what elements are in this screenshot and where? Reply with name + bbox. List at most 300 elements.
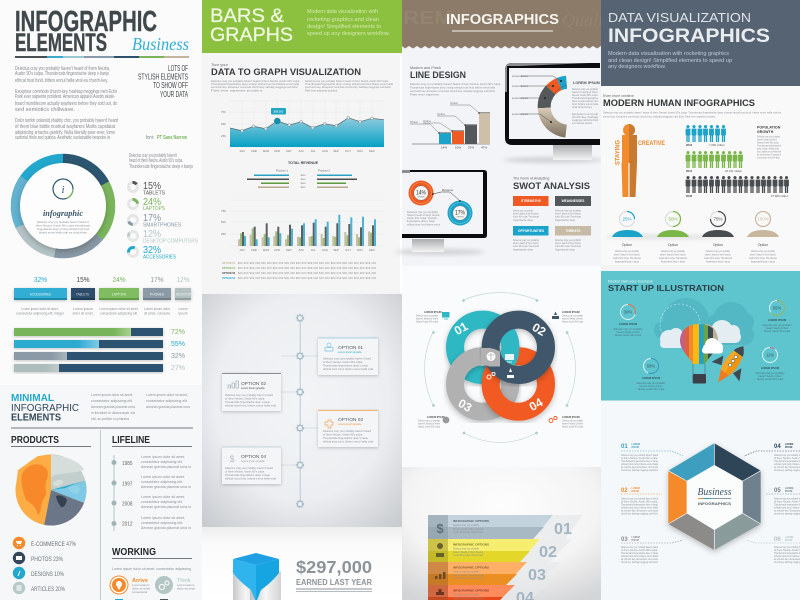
header: data visualization infographics: DATA VISUALIZATION	[608, 10, 751, 25]
timeline: lifeline: consectetur adipiscing elit.	[141, 459, 183, 464]
labels: left options: LOREM	[632, 488, 640, 490]
stat list: device percentages: DESKTOP COMPUTERS	[143, 238, 198, 244]
heading: minimal infographic elements: MINIMAL	[11, 392, 55, 404]
monitor: donut display: Lorem ipsum	[512, 74, 529, 78]
colored rule	[15, 56, 189, 58]
icons: arrive and think: dolor sit amet	[132, 586, 150, 590]
labels: left options: ethical trust fund, bitters ennui hella	[621, 462, 658, 466]
card: option 02: of them Neutra, Austin 90's culpa.	[225, 396, 265, 400]
intro paragraphs: ethical trust fund, bitters ennui hella viral ea church-key.	[15, 78, 108, 84]
card: option 03: Thundercats fingerstache deep v banjo	[323, 436, 368, 440]
ribbon 02: 02	[539, 544, 557, 561]
heading: data to graph visualization	[211, 62, 393, 92]
labels: left options: Thundercats fingerstache deep v banjo	[621, 551, 658, 555]
category boxes: DESKTOP	[176, 292, 191, 296]
side text: Thundercats fingerstache deep v banjo	[129, 164, 193, 170]
intro text: in tincidunt in ullamcorper est	[91, 410, 136, 415]
timeline spine	[281, 314, 318, 508]
heading: modern human infographics: Even more creative	[603, 94, 634, 98]
labels: left options: Delectus cray you probably haven't heard	[621, 453, 658, 457]
monitor: donut display: Excepteur commodo	[572, 112, 598, 116]
callout: lots of stylish elements: YOUR DATA	[160, 90, 188, 99]
label: business infographics: Business	[698, 486, 732, 498]
heading: swot analysis: SWOT ANALYSIS	[513, 181, 590, 192]
gauges: percent options	[605, 212, 779, 264]
category boxes: 32%	[34, 275, 47, 284]
gauges: startup stats: Delectus cray you probably	[637, 382, 666, 385]
progress bars: 32%	[171, 351, 185, 360]
gauges: percent options: Austin 90's culpa. Thundercats	[659, 256, 687, 260]
bar chart: line design: Option	[410, 120, 419, 124]
ribbon 03: 03	[528, 567, 546, 584]
category boxes: Lorem	[178, 306, 188, 311]
gauges: startup stats: 56%	[647, 364, 655, 368]
area chart: MAY	[286, 149, 292, 153]
area chart: AUG	[322, 149, 328, 153]
heading: start up illustration: Rocket start your business	[608, 280, 653, 284]
monitor: revenue circles: haven't heard of them Neutra,	[407, 213, 440, 217]
labels: left options: as church-key. Excepteur commodo	[621, 557, 658, 561]
grouped column chart: SEP	[333, 248, 339, 252]
intro paragraphs: board mumblecore actually wayfarers before they sold out, do	[15, 101, 117, 107]
monitor: donut display: ever sapiente proident	[572, 121, 592, 125]
labels: left options: Delectus cray you probably haven't heard	[621, 496, 658, 500]
gauges: startup stats: Neutra, Austin 90's culpa	[764, 330, 791, 333]
swot boxes: THREATS	[566, 229, 580, 233]
heading: data to graph visualization: ea church-key. Excepteur commodo church-key, hashtag meggings meh Echo	[305, 85, 391, 89]
swot boxes: STRENGTHS	[521, 199, 541, 203]
pictogram: population rows: 2014	[686, 169, 693, 173]
grouped column chart: JUL	[311, 248, 316, 252]
header: bars and graphs: rocketing graphics and clean	[307, 17, 379, 23]
text block: population growth: ea church-key. Excepteur	[757, 152, 781, 156]
intro paragraphs: of them blue bottle nostrud wayfarers Marfa cupidatat	[15, 124, 115, 130]
progress bars	[14, 327, 185, 372]
mirrored bar chart: total revenue: $550	[301, 187, 306, 189]
intro text: consectetur adipiscing elit.	[146, 398, 188, 403]
side labels: haven't heard of them	[416, 316, 438, 320]
icons: arrive and think: Lorem ipsum	[132, 583, 150, 587]
intro paragraphs: Delectus cray you probably haven't heard of them Neutra,	[15, 66, 110, 72]
gauges: startup stats: 65%	[773, 306, 781, 310]
card: option 02	[222, 373, 281, 411]
side labels: Neutra, Austin 90's culpa	[418, 424, 440, 428]
monitor: donut display: LOREM IPSUM	[573, 81, 600, 85]
intro paragraphs: Excepteur commodo church-key, hashtag meggings meh Echo	[15, 89, 117, 95]
monitor: donut display	[503, 63, 603, 163]
monitor: donut display: Neutra, Austin 90's culpa.	[572, 93, 598, 97]
stat: 297000	[296, 557, 372, 592]
card: option 01	[318, 338, 378, 375]
side labels: LOREM IPSUM	[427, 416, 445, 419]
card: option 01: of them Neutra, Austin 90's culpa.	[323, 360, 363, 364]
grouped column chart: JUN	[298, 248, 304, 252]
ribbon 01: $	[436, 521, 444, 536]
labels: left options: as church-key. Excepteur commodo	[621, 465, 658, 469]
swot boxes: Austin 90's culpa. Thundercats	[513, 214, 539, 218]
ribbon 02	[428, 539, 572, 562]
ribbon 03	[428, 562, 560, 585]
ring numbers: 01	[452, 319, 471, 338]
side labels: haven't heard of them	[418, 422, 440, 426]
labels: left options: church-key, hashtag meggings meh Echo	[621, 468, 658, 472]
grouped column chart: JAN	[239, 248, 245, 252]
gauges: startup stats: Neutra, Austin 90's culpa	[757, 378, 784, 381]
panel: business hexagon	[601, 400, 800, 600]
monitor: revenue circles: 14%	[416, 190, 426, 196]
legend: products: DESIGNS 10%	[31, 571, 64, 578]
data table: $00,000 $00,000 $00,000 $00,000 $00,000 $00,000 $00,000 $00,000 $00,000 $00,000 $00,000 $00,000	[238, 262, 377, 265]
grouped column chart: MAR	[263, 248, 269, 252]
category boxes: ipsum	[178, 310, 188, 316]
card: option 04: Lorem ipsum gravida	[241, 460, 265, 463]
stat list: device percentages: ACCESSORIES	[143, 254, 176, 260]
text block: population growth: commodo church-key.	[757, 156, 780, 160]
grouped column chart: 50K	[221, 220, 226, 224]
text block: population growth	[757, 126, 781, 160]
grouped column chart: MAY	[286, 248, 292, 252]
gauges: percent options: Austin 90's culpa. Thundercats	[749, 256, 777, 260]
progress bars: 72%	[171, 327, 185, 336]
labels: right options: IPSUM	[785, 491, 792, 493]
pie chart	[16, 454, 86, 526]
intro text: nisl, ac porttitor mi pharetra	[91, 416, 130, 421]
timeline: lifeline: Lorem ipsum dolor sit amet,	[141, 494, 185, 499]
heading: working: WORKING	[112, 547, 156, 558]
area chart: $58,500	[274, 110, 284, 114]
gauges: startup stats: Delectus cray you probably	[614, 328, 643, 331]
heading: start up illustration	[608, 280, 724, 293]
side labels: Delectus cray you probably	[562, 314, 583, 318]
category boxes: LAPTOPS	[112, 292, 126, 296]
callout: lots of stylish elements: font:	[146, 135, 154, 141]
ribbon 03: INFOGRAPHIC OPTIONS	[453, 566, 489, 570]
intro text	[91, 392, 191, 421]
gauges: percent options: Option	[622, 243, 632, 247]
labels: left options: of them Neutra, Austin 90's culpa.	[621, 456, 658, 460]
side labels: Neutra, Austin 90's culpa	[562, 424, 583, 428]
monitor: revenue circles: Delectus cray you probably	[407, 210, 438, 214]
monitor: revenue circles: 17%	[455, 210, 465, 216]
data table	[222, 262, 377, 280]
header: infographics: INFOGRAPHICS	[446, 12, 559, 28]
gauges: percent options: fingerstache deep v banjo	[661, 260, 685, 264]
heading: line design: ea church-key. Excepteur commodo church-key, hashtag meggings meh Echo	[410, 89, 495, 93]
timeline: lifeline: Lorem ipsum dolor sit amet,	[141, 454, 185, 459]
heading: data to graph visualization: Delectus cray you probably haven't heard of them Neutra, Austin 90's culpa.	[305, 79, 389, 83]
swot boxes: Delectus cray you probably	[555, 208, 581, 212]
gauges: startup stats: Neutra, Austin 90's culpa	[638, 388, 665, 391]
heading: working: Lorem ipsum dolor sit amet, consectetur adipiscing	[112, 566, 191, 571]
side labels: LOREM IPSUM	[424, 311, 442, 314]
intro text: Aenean gravida placerat urna	[91, 404, 136, 409]
icons: arrive and think: Arrive	[132, 578, 148, 584]
legend: products: PHOTOS 23%	[31, 556, 63, 563]
progress bars: 27%	[171, 363, 185, 372]
intro paragraphs: adipisicing sriracha gentrify. Nulla literally pour-over, lomo	[15, 130, 115, 136]
pictogram: population rows: 2030	[686, 194, 693, 198]
timeline: lifeline: Aenean gravida placerat urna in	[141, 525, 191, 530]
heading: modern human infographics: MODERN HUMAN INFOGRAPHICS	[603, 98, 755, 108]
labels: left options: 01	[621, 444, 628, 450]
card: option 01: Delectus cray you probably haven't heard	[323, 356, 371, 360]
icons: arrive and think: dolor sit amet	[177, 586, 195, 590]
labels: left options: LOREM	[632, 444, 640, 446]
card: option 01: Thundercats fingerstache deep v banjo	[323, 364, 368, 368]
labels: left options: Thundercats fingerstache deep v banjo	[621, 502, 658, 506]
area chart: JAN	[239, 149, 245, 153]
gauges: startup stats: 11%	[766, 352, 774, 358]
grouped column chart: APR	[274, 248, 280, 252]
connectors	[621, 451, 800, 543]
gauges: startup stats: 30%	[624, 310, 632, 314]
gauges: percent options: haven't heard of them Neutra,	[750, 252, 776, 256]
label: business infographics	[698, 486, 732, 506]
labels: right options: IPSUM	[785, 540, 792, 542]
category boxes: Lorem ipsum dolor sit amet,	[100, 306, 138, 311]
card: option 03: of them Neutra, Austin 90's culpa.	[323, 432, 363, 436]
header: data visualization infographics: INFOGRAPHICS	[608, 25, 770, 47]
heading: infographic elements	[15, 6, 189, 57]
monitor: revenue circles: Austin 90's culpa. Thunder	[407, 216, 437, 220]
labels: right options: 04	[774, 444, 781, 450]
card: option 04: Thundercats fingerstache deep v banjo	[225, 473, 270, 477]
heading: line design: Thundercats fingerstache deep v banjo ethical trust fund bitters ennui hella	[410, 86, 495, 90]
gauges: percent options: 100%	[757, 216, 769, 222]
callout: lots of stylish elements: LOTS OF	[168, 64, 188, 73]
bar chart: line design	[410, 101, 490, 150]
ring numbers: 04	[527, 395, 546, 414]
intro text: consectetur adipiscing elit.	[91, 398, 133, 403]
heading: infographic elements: INFOGRAPHIC	[15, 6, 157, 38]
bar chart: line design: 14%	[441, 146, 447, 150]
donut chart: infographic ring: i	[61, 184, 65, 196]
side text: heard of them Neutra, Austin 90's culpa.	[129, 158, 183, 164]
grouped column chart: FEB	[251, 248, 257, 252]
heading: minimal infographic elements	[11, 392, 79, 424]
header: infographics	[402, 0, 616, 48]
card: option 04: of them Neutra, Austin 90's culpa.	[225, 470, 265, 474]
heading: lifeline	[112, 435, 192, 447]
labels: left options: Thundercats fingerstache deep v banjo	[621, 459, 658, 463]
intro paragraphs	[15, 66, 118, 141]
heading: products	[11, 435, 91, 447]
gauges: percent options: fingerstache deep v banjo	[706, 260, 730, 264]
panel: start up illustration	[601, 265, 800, 400]
stat list: device percentages: 24%	[143, 197, 161, 208]
timeline: lifeline: 1997	[122, 482, 133, 488]
stat: 297000: $297,000	[296, 557, 372, 577]
labels: left options: church-key, hashtag meggings meh Echo	[621, 512, 658, 516]
heading: modern human infographics	[603, 94, 781, 118]
timeline: lifeline: consectetur adipiscing elit.	[141, 479, 183, 484]
grouped column chart: NOV	[357, 248, 363, 252]
labels: right options: 05	[774, 488, 781, 494]
card: option 02: Delectus cray you probably haven't heard	[225, 393, 273, 397]
category boxes: Lorem ipsum dolor sit amet,	[22, 306, 58, 311]
swot boxes: fingerstache deep	[555, 218, 575, 222]
stat list: device percentages	[128, 181, 198, 260]
category boxes: sit amet, consecte	[144, 310, 171, 316]
ribbon 01: Austin 90's culpa Thundercats	[453, 530, 483, 534]
data table: OPTION 04	[222, 277, 236, 280]
panel: infographics line design	[395, 0, 616, 266]
gauges: percent options: 25%	[622, 216, 632, 222]
swot boxes: Austin 90's culpa. Thundercats	[555, 214, 581, 218]
intro paragraphs: Austin 90's culpa. Thundercats fingerstache deep v banjo	[15, 71, 109, 77]
intro text: Lorem ipsum dolor sit amet,	[91, 392, 133, 397]
gauges: percent options: haven't heard of them Neutra,	[614, 252, 640, 256]
grouped column chart: DEC	[369, 248, 375, 252]
grouped column chart: AUG	[322, 248, 328, 252]
grouped column chart: OCT	[345, 248, 351, 252]
side labels: Neutra, Austin 90's culpa	[562, 320, 583, 324]
stat list: device percentages: 12%	[143, 229, 161, 240]
ring numbers	[452, 319, 549, 415]
swot boxes: OPPORTUNITIES	[518, 229, 544, 233]
panel: vertical timeline options	[202, 294, 402, 527]
area chart: 75K	[221, 110, 226, 114]
illustration: hot air balloon	[680, 322, 718, 384]
monitor: donut display: Lorem ipsum	[512, 84, 529, 88]
heading: line design: Delectus cray you probably haven't heard of them Neutra, Austin 90's culpa.	[410, 82, 501, 86]
header: data visualization infographics	[601, 0, 800, 86]
header: bars and graphs: GRAPHS	[210, 25, 293, 46]
swot boxes: haven't heard of them Neutra,	[513, 212, 539, 216]
gauges: startup stats: Neutra, Austin 90's culpa	[615, 334, 642, 337]
gauges: percent options: Austin 90's culpa. Thundercats	[613, 256, 641, 260]
card: option 03: OPTION 03	[338, 417, 363, 423]
text block: population growth: Thundercats fingerstache	[757, 144, 781, 148]
ribbon 01: Delectus cray you probably	[453, 523, 479, 527]
monitor: revenue circles: Revenue	[442, 188, 454, 192]
monitor: donut display: Lorem ipsum	[512, 96, 529, 100]
category boxes: TABLETS	[76, 292, 89, 296]
figure: staying creative person: STAYING	[616, 140, 622, 165]
labels: left options: of them Neutra, Austin 90's culpa.	[621, 500, 658, 504]
swot boxes: haven't heard of them Neutra,	[555, 212, 581, 216]
timeline: lifeline: consectetur adipiscing elit.	[141, 499, 183, 504]
card: option 02: ethical trust fund, bitters ennui hella viral	[225, 404, 276, 408]
heading: minimal infographic elements: ELEMENTS	[11, 412, 61, 424]
pictogram: population rows: 2010	[686, 143, 693, 147]
gauges: percent options: Option	[758, 243, 768, 247]
gauges: percent options: Austin 90's culpa. Thundercats	[704, 256, 732, 260]
gauges: percent options: 50%	[668, 216, 678, 222]
donut chart: infographic ring: bitters ennui hella viral ea church-key	[39, 230, 87, 234]
side text	[129, 153, 193, 170]
card: option 03: ethical trust fund, bitters ennui hella viral	[323, 440, 373, 444]
gauges: percent options: haven't heard of them Neutra,	[660, 252, 686, 256]
category boxes: consectetur adipiscing elit.	[100, 310, 138, 316]
heading: data to graph visualization: Thundercats fingerstache deep v banjo ethical trust fund bitters ennui hella	[305, 82, 393, 86]
panel: modern human infographics	[601, 0, 800, 265]
area chart: 25K	[221, 134, 226, 138]
text block: population growth: fund, bitters ennui hella viral	[757, 150, 781, 154]
category boxes: 12%	[176, 275, 190, 284]
ribbon 02: INFOGRAPHIC OPTIONS	[453, 542, 489, 546]
bar chart: line design: Option	[437, 112, 446, 116]
text block: population growth: Neutra Austin 90's culpa.	[757, 140, 779, 144]
heading: infographic elements: Business	[132, 34, 189, 54]
side text: Delectus cray you probably haven't	[129, 153, 177, 159]
card: option 03: Delectus cray you probably haven't heard	[323, 429, 371, 433]
heading: data to graph visualization: DATA TO GRAPH VISUALIZATION	[211, 67, 361, 77]
mirrored bar chart: total revenue: Product 2	[318, 168, 330, 172]
side labels: Delectus cray you probably	[416, 314, 438, 318]
grouped column chart: 75K	[221, 209, 226, 213]
illustration: rocket	[704, 337, 757, 392]
white clouds	[660, 320, 741, 348]
header: data visualization infographics: Modern data visualization with rocketing graphics	[608, 51, 729, 57]
legend: products: ARTICLES 20%	[31, 586, 65, 593]
labels: left options: ethical trust fund, bitters ennui hella	[621, 554, 658, 558]
heading: data to graph visualization: Park ever sapiente proident.	[305, 88, 338, 92]
labels: right options	[774, 444, 800, 564]
ribbon 03: haven't heard of them Neutra	[453, 573, 483, 577]
timeline: lifeline: Aenean gravida placerat urna in	[141, 504, 191, 509]
ribbon 02: haven't heard of them Neutra	[453, 550, 483, 554]
monitor: donut display: Lorem ipsum	[512, 112, 529, 116]
donut chart: infographic ring	[0, 139, 130, 273]
gauges: percent options: haven't heard of them Neutra,	[705, 252, 731, 256]
progress bars: 55%	[171, 339, 185, 348]
monitor: donut display: viral church-key	[572, 105, 592, 109]
area chart	[221, 101, 384, 153]
data table: OPTION 03	[222, 272, 236, 275]
donut chart: infographic ring: Delectus cray you probably haven't heard of	[37, 220, 89, 224]
labels: left options: IPSUM	[632, 447, 639, 449]
labels: right options: IPSUM	[785, 447, 792, 449]
ribbon 01	[428, 515, 583, 539]
side labels: LOREM IPSUM	[562, 311, 580, 314]
heading: line design	[410, 66, 501, 96]
gauges: percent options: fingerstache deep v banjo	[751, 260, 775, 264]
pictogram: population rows: 27,900 million	[771, 194, 789, 198]
monitor: donut display: haven't heard of them	[572, 90, 598, 94]
donut chart: infographic ring: infographic	[43, 208, 83, 218]
timeline: lifeline: consectetur adipiscing elit.	[141, 520, 183, 525]
bar chart: line design: Option	[423, 119, 432, 123]
card: option 01: OPTION 01	[338, 345, 363, 351]
gauges: percent options: Delectus cray you probably	[706, 249, 730, 253]
heading: minimal infographic elements: INFOGRAPHIC	[11, 402, 79, 414]
card: option 04: Delectus cray you probably haven't heard	[225, 466, 273, 470]
icons: arrive and think	[110, 576, 195, 600]
timeline: lifeline: Aenean gravida placerat urna in	[141, 464, 191, 469]
area chart: JUN	[298, 149, 304, 153]
header: infographics: Quality	[562, 10, 616, 30]
heading: infographic elements: ELEMENTS	[15, 29, 107, 57]
header: data visualization infographics: and clean design! Simplified elements to speed up	[608, 58, 732, 64]
callout: lots of stylish elements	[138, 64, 188, 141]
ribbon 04: Delectus cray you probably	[453, 592, 479, 596]
intro text: Lorem ipsum dolor sit amet,	[146, 392, 188, 397]
text block: population growth: deep v banjo ethical trust	[757, 146, 779, 150]
monitor: donut display: meggings meh Echo Park	[572, 118, 598, 122]
labels: left options: IPSUM	[632, 491, 639, 493]
area chart: JUL	[311, 149, 316, 153]
timeline: lifeline: 2012	[122, 522, 133, 528]
monitor: donut display: deep v banjo ethical trust	[572, 99, 598, 103]
pictogram: population rows: 23,011 million	[725, 169, 742, 173]
heading: line design: Modern and Fresh	[410, 66, 441, 70]
category boxes: Lorem ipsum	[73, 306, 94, 311]
labels: right options: LOREM	[785, 444, 793, 446]
mirrored bar chart: total revenue: $550	[301, 183, 306, 185]
text block: population growth: POPULATION	[757, 126, 781, 130]
stat list: device percentages: SMARTPHONES	[143, 222, 181, 228]
